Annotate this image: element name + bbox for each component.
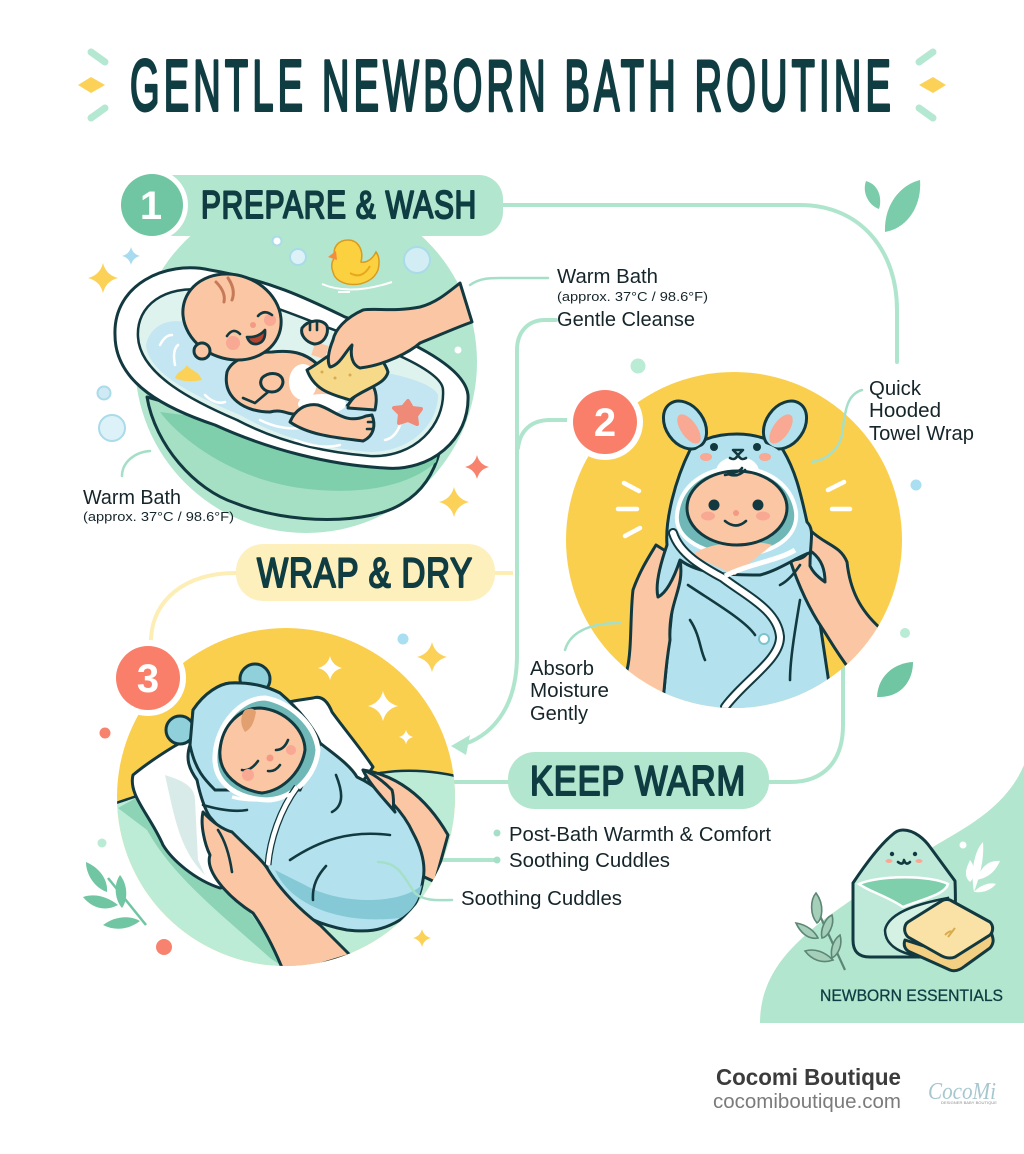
badge 2: 2 [594,401,616,445]
footer logo: DESIGNER BABY BOUTIQUE [941,1100,997,1105]
callout: warm bath lower left: Warm Bath [83,487,181,509]
callout: warm bath top right: Warm Bath [557,266,658,288]
swaddle folds [203,775,390,900]
callout: quick hooded towel wrap: Quick [869,378,922,400]
swaddle front trim [268,787,297,865]
lower hand [202,812,350,975]
callout: post-bath warmth [509,824,771,872]
callout: gentle cleanse: Gentle Cleanse [557,309,695,331]
title ornaments left [78,52,105,118]
towel body [662,563,830,708]
callout: quick hooded towel wrap: Towel Wrap [869,423,974,445]
white sprig [960,842,1000,892]
hood [657,434,825,597]
callout: warm bath lower left: (approx. 37°C / 98.6°F) [83,509,234,524]
badge 2 [567,384,643,460]
step 3 circle background [117,628,455,966]
callout: absorb moisture gently: Gently [530,703,588,725]
left hand [626,543,682,694]
sprig left [83,862,146,929]
badge 3: 3 [137,657,159,701]
foam and sponge [289,343,388,400]
footer logo: CocoMi [928,1079,996,1105]
panel: step 1 prepare and wash [88,191,489,533]
callout: soothing cuddles: Soothing Cuddles [461,888,622,910]
decorative leaf and dots right [630,358,922,697]
callout: absorb moisture gently: Moisture [530,680,609,702]
panel: step 2 wrap and dry [566,372,902,720]
rubber duck [322,240,392,292]
callout: warm bath top right: (approx. 37°C / 98.6°F) [557,289,708,304]
callout: quick hooded towel wrap [812,378,974,462]
decorative leaves top right [865,180,920,232]
heading pill: wrap and dry: WRAP & DRY [257,549,473,596]
badge 3 [110,640,186,716]
panel: newborn essentials [760,765,1024,1023]
bedding [110,771,460,980]
bubbles and sparkles [88,236,489,517]
hood snout and eyes [716,456,759,470]
callout: quick hooded towel wrap: Hooded [869,400,941,422]
title ornaments right [919,52,946,118]
callout: soothing cuddles [378,862,622,910]
badge 1 [116,169,188,241]
step 2 circle background [566,372,902,708]
white sparkles [318,656,413,744]
swaddle [188,683,424,931]
pillow [132,697,373,888]
footer brand [713,1064,901,1113]
step 1 circle background [135,191,477,533]
heading pill: wrap and dry [236,544,495,601]
step 1 tub [115,268,468,520]
right hand [790,530,880,670]
towel wrap trim [673,533,780,707]
ears [662,400,708,450]
hood [190,683,320,790]
hand with sponge [328,283,472,368]
fingertips over swaddle [363,770,395,812]
heading pill: prepare and wash: PREPARE & WASH [201,184,477,227]
hood inner [677,468,796,556]
callout: absorb moisture gently [530,623,620,725]
bath toys [175,365,421,424]
sage sprig [796,893,845,970]
badge 1: 1 [140,184,162,228]
shine ticks [618,482,850,536]
hooded towel [853,830,955,957]
hood ears [238,662,272,687]
callout: post-bath warmth: Post-Bath Warmth & Comfort [509,824,771,846]
heading pill: keep warm: KEEP WARM [530,757,746,804]
essentials corner background [760,765,1024,1023]
folded yellow towel [904,899,993,971]
hood trim [215,698,318,800]
sleeping face [220,708,305,793]
callout: absorb moisture gently: Absorb [530,658,594,680]
callout: warm bath lower left [83,451,234,524]
decorative dots and sparkles around step 3 [98,634,447,955]
heading pill: prepare and wash [150,175,503,236]
baby face [687,471,787,545]
right hand [363,770,448,882]
baby in tub [171,260,376,441]
flow connectors [151,205,897,864]
callout: post-bath warmth: Soothing Cuddles [509,850,670,872]
essentials label: NEWBORN ESSENTIALS [820,986,1003,1005]
panel: step 3 keep warm [110,628,460,980]
callout: warm bath top right [470,266,708,304]
footer brand: Cocomi Boutique [716,1064,901,1090]
footer brand: cocomiboutique.com [713,1091,901,1113]
baby neck [692,542,772,575]
